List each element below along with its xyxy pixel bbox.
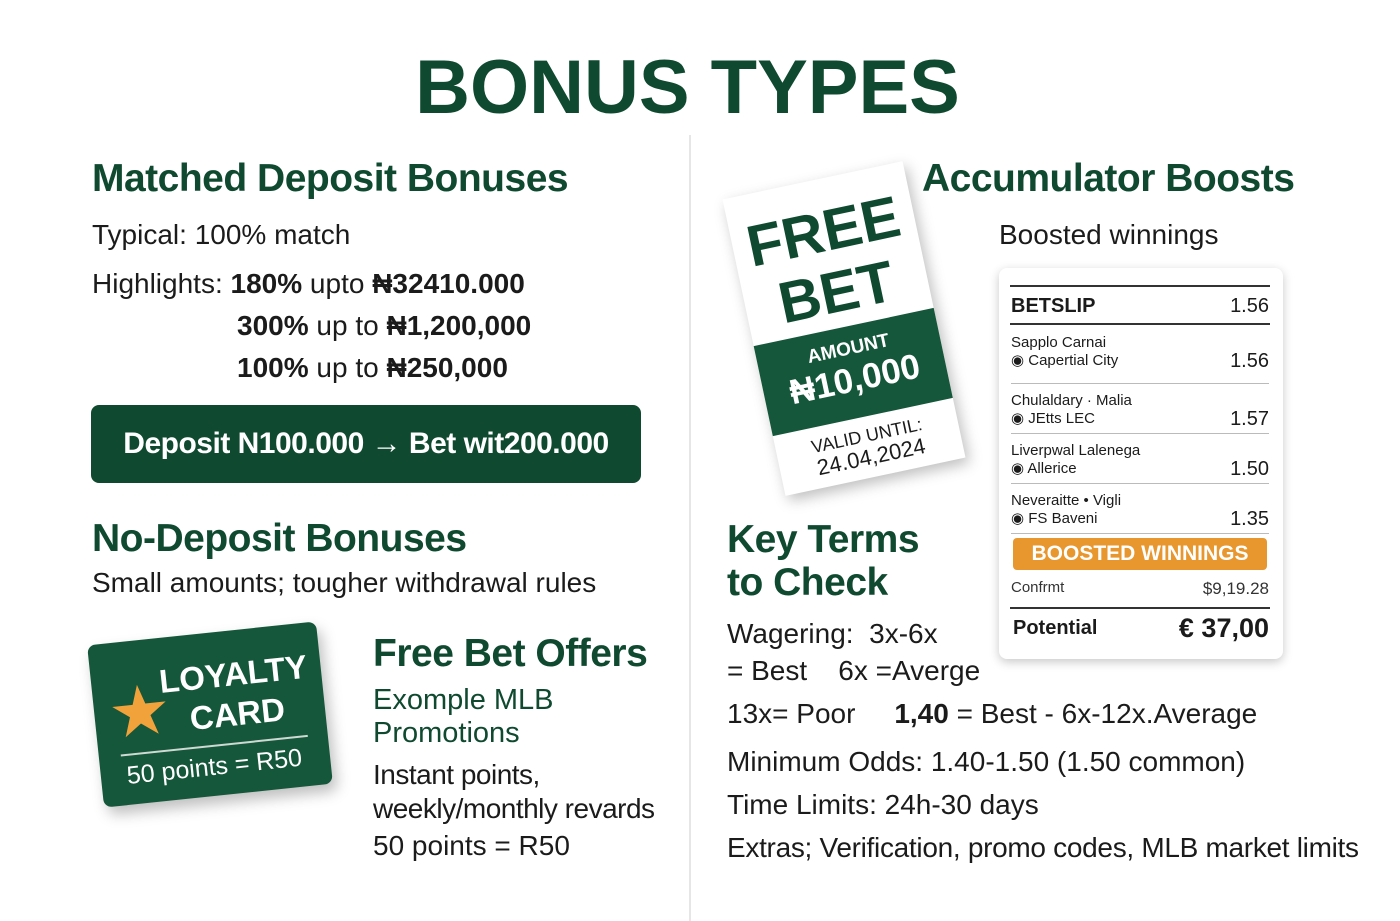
panel: key terms: Minimum Odds: 1.40-1.50 (1.50 common) <box>727 746 1245 777</box>
bet rows: ◉ FS Baveni <box>1011 510 1097 527</box>
bet rows: 1.56 <box>1230 350 1269 372</box>
confirm row: $9,19.28 <box>1203 579 1269 598</box>
bet rows <box>1011 334 1269 534</box>
band: amount: ₦10,000 <box>786 347 924 412</box>
text: free bet <box>741 184 906 336</box>
text: loyalty card: LOYALTY <box>157 648 309 700</box>
panel: accumulator boosts <box>922 157 1294 250</box>
panel: no-deposit <box>92 517 596 598</box>
banner: deposit <box>91 405 641 483</box>
heading: no-deposit: No-Deposit Bonuses <box>92 517 467 560</box>
bet rows: 1.50 <box>1230 458 1269 480</box>
text: wagering: = Best 6x =Averge <box>727 655 980 686</box>
bet rows: Sapplo Carnai <box>1011 334 1106 351</box>
text: highlights: 100% up to ₦250,000 <box>237 352 508 383</box>
title: BONUS TYPES <box>415 45 960 130</box>
text: free bet: FREE <box>741 184 906 280</box>
confirm row: Confrmt <box>1011 579 1064 596</box>
bet rows: ◉ Capertial City <box>1011 352 1118 369</box>
subheading: Exomple MLB <box>373 684 554 716</box>
boosted winnings badge <box>1013 538 1267 570</box>
betslip <box>999 268 1283 659</box>
icon: star: ★ <box>104 669 175 753</box>
potential row: € 37,00 <box>1179 613 1269 643</box>
bet rows: 1.57 <box>1230 408 1269 430</box>
bet rows: 1.35 <box>1230 508 1269 530</box>
text: valid <box>810 414 928 480</box>
band: amount: AMOUNT <box>805 330 891 368</box>
text: wagering <box>727 618 980 686</box>
betslip header: 1.56 <box>1230 295 1269 317</box>
loyalty card <box>87 621 333 808</box>
subheading <box>373 684 554 749</box>
boosted winnings badge: BOOSTED WINNINGS <box>1031 542 1248 565</box>
banner: deposit: Deposit N100.000 → Bet wit200.000 <box>123 427 609 460</box>
text: valid: 24.04,2024 <box>815 433 928 480</box>
text: highlights: Highlights: 180% upto ₦32410.000 <box>92 268 525 299</box>
text: free bet <box>373 759 655 824</box>
free bet card <box>723 161 965 496</box>
subheading: Promotions <box>373 717 520 749</box>
heading: accumulator: Accumulator Boosts <box>922 157 1294 200</box>
band: amount <box>754 308 953 436</box>
bet rows: ◉ JEtts LEC <box>1011 410 1095 427</box>
betslip header: BETSLIP <box>1011 295 1095 317</box>
heading: key terms <box>727 518 919 604</box>
heading: key terms: to Check <box>727 561 888 604</box>
heading: free bet offers: Free Bet Offers <box>373 632 647 675</box>
bet rows: Chulaldary · Malia <box>1011 392 1132 409</box>
bet rows: Liverpwal Lalenega <box>1011 442 1140 459</box>
panel: key terms: Extras; Verification, promo codes, MLB market limits <box>727 832 1359 863</box>
text: terms: 13x= Poor 1,40 = Best - 6x-12x.Average <box>727 698 1257 729</box>
text: free bet: Instant points, <box>373 759 540 790</box>
panel: free bet offers: 50 points = R50 <box>373 830 570 861</box>
divider <box>689 135 691 921</box>
text: loyalty card: CARD <box>188 690 287 737</box>
text: boosted winnings: Boosted winnings <box>999 219 1218 250</box>
text: wagering: Wagering: 3x-6x <box>727 618 938 649</box>
potential row <box>1013 613 1269 643</box>
text: valid: VALID UNTIL: <box>810 414 924 457</box>
betslip header <box>1011 295 1269 317</box>
text: typical: Typical: 100% match <box>92 219 350 250</box>
text: free bet: BET <box>773 248 900 336</box>
text: loyalty card <box>157 648 309 737</box>
text: no-deposit: Small amounts; tougher withdrawal rules <box>92 567 596 598</box>
panel: matched deposit <box>91 157 641 483</box>
text: free bet: weekly/monthly revards <box>373 793 655 824</box>
bet rows: ◉ Allerice <box>1011 460 1077 477</box>
text: highlights <box>92 268 531 383</box>
heading: matched deposit: Matched Deposit Bonuses <box>92 157 568 200</box>
heading: key terms: Key Terms <box>727 518 919 561</box>
panel: key terms: Time Limits: 24h-30 days <box>727 789 1039 820</box>
panel: free bet offers <box>373 632 655 861</box>
text: highlights: 300% up to ₦1,200,000 <box>237 310 531 341</box>
potential row: Potential <box>1013 617 1097 639</box>
text: points: 50 points = R50 <box>126 744 303 790</box>
panel: key terms <box>727 518 1359 863</box>
confirm row <box>1011 579 1269 598</box>
bet rows: Neveraitte • Vigli <box>1011 492 1121 509</box>
